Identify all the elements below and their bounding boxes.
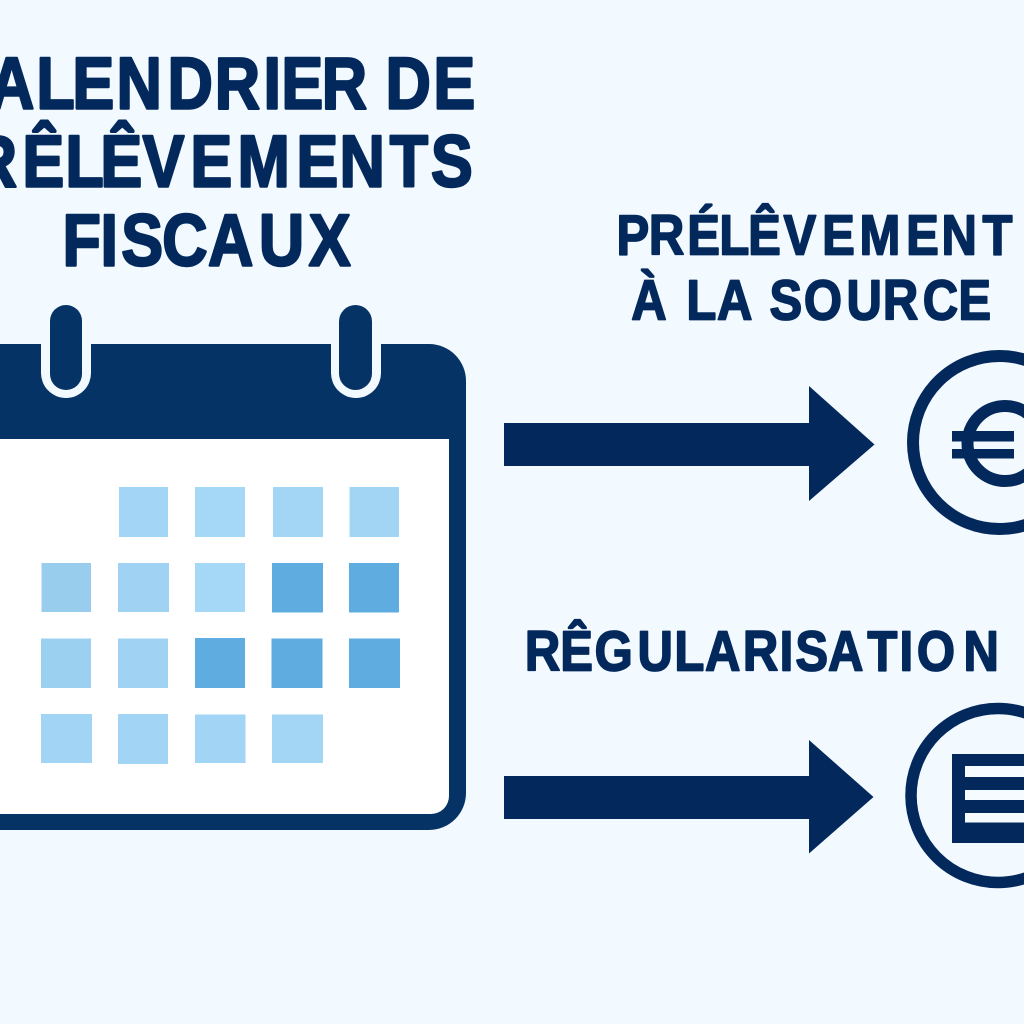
- label: prélèvement à la source: [617, 202, 1012, 332]
- title: FISCAUX: [63, 200, 351, 282]
- label: prélèvement à la source: À LA SOURCE: [631, 268, 991, 332]
- calendar day squares: [41, 487, 400, 764]
- label: régularisation: RÊGULARISATION: [525, 618, 999, 683]
- left binder ring: [41, 305, 91, 398]
- right binder ring: [331, 305, 381, 398]
- calendar frame: [0, 344, 466, 830]
- arrow: to euro icon: [504, 386, 874, 501]
- label: prélèvement à la source: PRÉLÊVEMENT: [617, 202, 1012, 267]
- calendar page: [0, 439, 449, 814]
- title: [0, 43, 475, 282]
- arrow: to document icon: [504, 740, 874, 854]
- icon: euro coin: [913, 356, 1024, 529]
- icon: document lines: [911, 708, 1024, 882]
- calendar icon: [0, 305, 466, 830]
